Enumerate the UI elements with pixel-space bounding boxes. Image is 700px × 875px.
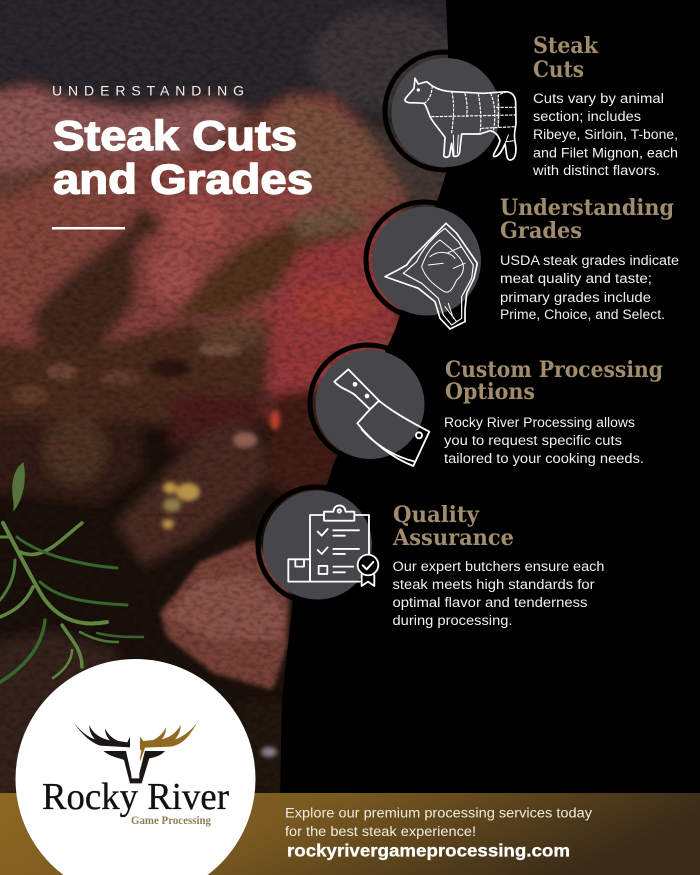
item: understanding grades: primary grades include [500,290,651,305]
heading: Quality [393,502,480,528]
icon: cow cuts diagram [385,52,516,170]
item: quality assurance: during processing. [392,613,512,628]
icon: cleaver [310,345,429,466]
item: custom processing [310,345,663,466]
logo badge [16,659,256,875]
rosemary sprig [0,463,143,682]
item: quality assurance: optimal flavor and tenderness [392,595,588,610]
logo wordmark: Rocky River [42,776,229,818]
item: quality assurance: Assurance [392,525,514,551]
background photo: sliced steak on wood [0,0,470,800]
item: quality assurance [258,487,604,628]
item: understanding grades: meat quality and taste; [500,271,652,286]
item: steak cuts: and Filet Mignon, each [533,146,678,160]
item: custom processing: you to request specific cuts [444,433,622,448]
item: custom processing: Options [445,379,535,405]
body text: Cuts vary by animal [533,91,664,106]
lower steak piece [12,344,290,690]
body text: Rocky River Processing allows [444,415,635,430]
body text: USDA steak grades indicate [500,253,679,268]
heading: Understanding [500,195,674,221]
call to action text: Explore our premium processing services today [285,806,592,820]
photo grain [0,0,450,800]
title underline [52,227,125,230]
main title block [52,82,313,230]
body text: Our expert butchers ensure each [392,559,604,574]
item: steak cuts: Ribeye, Sirloin, T-bone, [533,127,678,142]
footer band: for the best steak experience! [285,824,476,839]
eyebrow: UNDERSTANDING [52,82,244,98]
item: steak cuts [385,33,678,178]
icon: clipboard checklist with badge [258,487,378,603]
item: custom processing: tailored to your cooking needs. [444,451,644,466]
title line two: and Grades [53,156,313,202]
item: steak cuts: Cuts [533,57,584,83]
item: steak cuts: section; includes [533,109,641,124]
title line one: Steak Cuts [53,112,297,159]
item: understanding grades: Prime, Choice, and Select. [500,307,665,322]
heading: Steak [533,33,599,59]
black panel [280,0,700,800]
website url: rockyrivergameprocessing.com [287,840,570,860]
item: quality assurance: steak meets high standards for [392,577,595,592]
item: steak cuts: with distinct flavors. [532,163,660,178]
footer band [0,793,700,875]
item: understanding grades: Grades [500,218,582,244]
item: understanding grades [366,195,679,329]
highlights on steak [162,410,280,757]
logo tagline: Game Processing [131,815,211,827]
icon: stag antler logo mark [73,722,197,783]
icon: t-bone steak outline [366,202,482,329]
heading: Custom Processing [445,357,663,383]
